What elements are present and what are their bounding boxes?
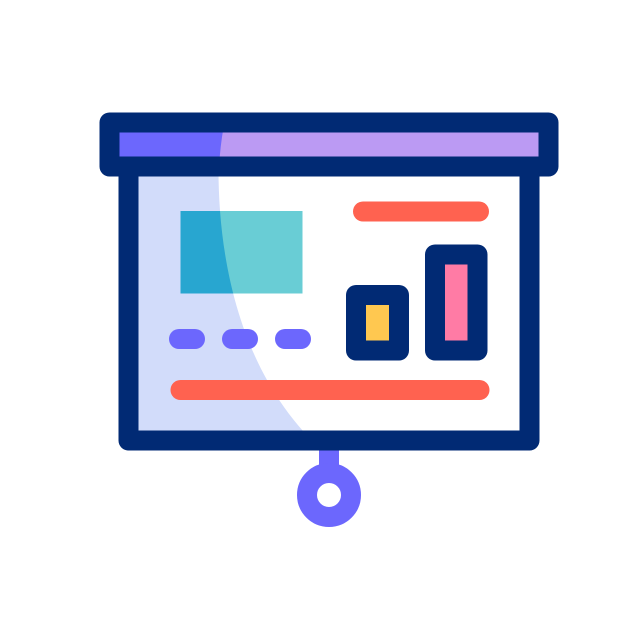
dashes (169, 329, 311, 349)
screen stem (319, 445, 339, 475)
top text line (353, 202, 489, 222)
icon: projector screen (100, 112, 558, 527)
tall bar (435, 254, 478, 350)
top roller bar (110, 122, 548, 166)
screen pull handle (307, 473, 351, 517)
screen panel (128, 166, 530, 440)
bottom text line (170, 380, 490, 400)
small bar (356, 295, 399, 350)
image placeholder (180, 211, 302, 294)
